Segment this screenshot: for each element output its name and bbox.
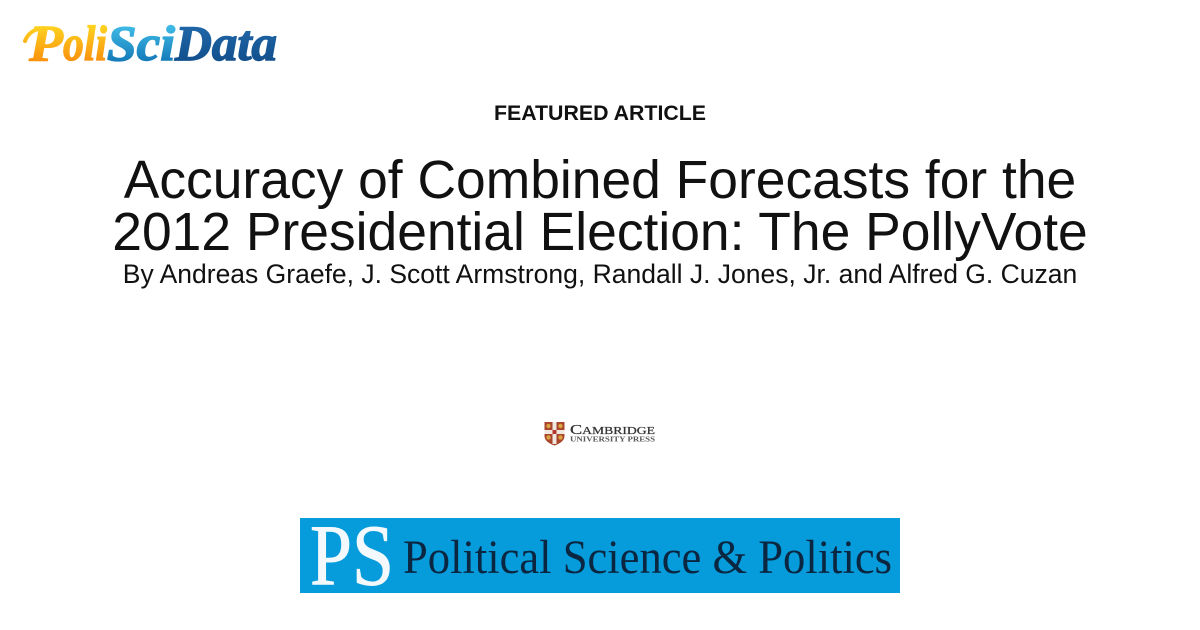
- authors: By Andreas Graefe, J. Scott Armstrong, Randall J. Jones, Jr. and Alfred G. Cuzan: [123, 259, 1077, 289]
- logo: PoliSciData: Sci: [107, 15, 175, 71]
- logo: PoliSciData: [22, 15, 277, 73]
- banner: PS Political Science & Politics: [300, 506, 900, 604]
- banner: PS Political Science & Politics: PS: [310, 506, 394, 604]
- logo: PoliSciData: P: [28, 16, 64, 73]
- logo: PoliSciData: oli: [63, 15, 107, 71]
- title: 2012 Presidential Election: The PollyVote: [112, 203, 1088, 262]
- logo: Cambridge University Press: [544, 422, 655, 446]
- logo: Cambridge University Press: C AMBRIDGE: [570, 423, 655, 438]
- title: Accuracy of Combined Forecasts for the: [124, 151, 1076, 210]
- logo: Cambridge University Press: UNIVERSITY PRESS: [570, 436, 655, 444]
- title: [112, 151, 1088, 262]
- logo: PoliSciData: Data: [174, 15, 277, 71]
- eyebrow: featured article: FEATURED ARTICLE: [494, 101, 706, 125]
- icon: P swash: [25, 28, 44, 41]
- banner: PS Political Science & Politics: Political Science & Politics: [403, 531, 892, 584]
- icon: crest shield: [544, 422, 564, 446]
